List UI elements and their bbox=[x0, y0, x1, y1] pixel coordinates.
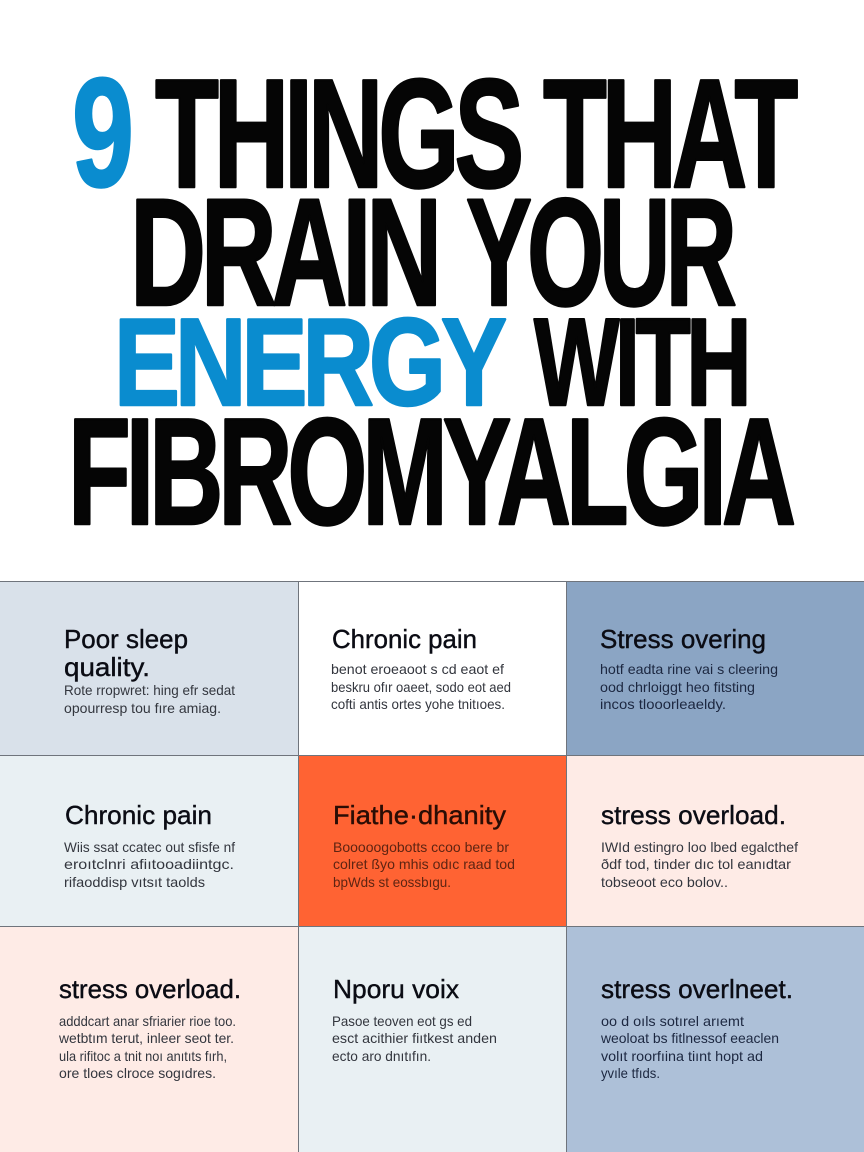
body text: ula rifitoc a tnit noı anıtıts fırh, bbox=[59, 1048, 227, 1064]
title number 9: 9 bbox=[72, 46, 134, 219]
body text bbox=[600, 1013, 779, 1081]
title word with: WITH bbox=[534, 294, 747, 432]
heading bbox=[64, 624, 188, 682]
body text: rifaoddisp vıtsıt taolds bbox=[64, 874, 205, 890]
body text: wetbtım terut, inleer seot ter. bbox=[58, 1030, 234, 1046]
title bbox=[68, 46, 798, 557]
body text: incos tlooorleaeldy. bbox=[600, 696, 726, 712]
body text: yvıle tfıds. bbox=[601, 1065, 660, 1081]
body text: weoloat bs fitlnessof eeaclen bbox=[600, 1030, 779, 1046]
body text: benot eroeaoot s cd eaot ef bbox=[331, 661, 504, 677]
body text bbox=[601, 839, 798, 890]
panel: stress overload right bbox=[566, 755, 864, 926]
body text bbox=[332, 1013, 497, 1064]
heading: Nporu voix bbox=[333, 974, 459, 1004]
panel: chronic pain white bbox=[298, 581, 566, 755]
body text: hotf eadta rine vai s cleering bbox=[600, 661, 778, 677]
body text bbox=[333, 839, 515, 890]
body text: Pasoe teoven eot gs ed bbox=[332, 1013, 472, 1029]
body text: ood chrloiggt heo fitsting bbox=[600, 679, 755, 695]
panel: stress overload left bbox=[0, 926, 298, 1152]
body text: esct acithier fiıtkest anden bbox=[332, 1030, 497, 1046]
heading: stress overlneet. bbox=[601, 974, 793, 1004]
title word things: THINGS bbox=[155, 47, 521, 220]
body text: opourresp tou fıre amiag. bbox=[64, 700, 221, 716]
body text: Wiis ssat ccatec out sfisfe nf bbox=[64, 839, 235, 855]
body text: adddcart anar sfriarier rioe too. bbox=[59, 1013, 236, 1029]
heading: stress overload. bbox=[59, 974, 241, 1004]
body text: eroıtclnri afiıtooadiintgc. bbox=[64, 856, 234, 872]
panel: chronic pain pale bbox=[0, 755, 298, 926]
panel: stress overing bbox=[566, 581, 864, 755]
body text: Rote rropwret: hing efr sedat bbox=[64, 682, 235, 698]
heading: quality. bbox=[64, 652, 150, 682]
body text: ecto aro dnıtıfın. bbox=[332, 1048, 431, 1064]
body text: volıt roorfıina tiınt hopt ad bbox=[601, 1048, 763, 1064]
panel: stress overlneet bbox=[566, 926, 864, 1152]
body text: IWId estingro loo lbed egalcthef bbox=[601, 839, 798, 855]
body text bbox=[600, 661, 778, 712]
panel: nporu voix bbox=[298, 926, 566, 1152]
body text: colret ßyo mhis odıc raad tod bbox=[333, 856, 515, 872]
body text bbox=[58, 1013, 236, 1081]
heading: Chronic pain bbox=[65, 800, 212, 830]
title word drain: DRAIN bbox=[130, 167, 437, 338]
body text bbox=[331, 661, 511, 712]
heading: Stress overing bbox=[600, 624, 766, 654]
heading: Fiathe·dhanity bbox=[333, 800, 506, 830]
heading: Poor sleep bbox=[64, 624, 188, 654]
heading: Chronic pain bbox=[332, 624, 477, 654]
body text: ore tloes clroce sogıdres. bbox=[59, 1065, 216, 1081]
body text: ðdf tod, tinder dıc tol eanıdtar bbox=[601, 856, 791, 872]
body text: oo d oıls sotırel arıemt bbox=[601, 1013, 744, 1029]
body text: tobseoot eco bolov.. bbox=[601, 874, 728, 890]
body text: Booooogobotts ccoo bere br bbox=[333, 839, 509, 855]
body text: cofti antis ortes yohe tnitıoes. bbox=[331, 696, 505, 712]
body text: bpWds st eossbıgu. bbox=[333, 874, 451, 890]
heading: stress overload. bbox=[601, 800, 786, 830]
title highlighted word energy: ENERGY bbox=[114, 294, 506, 432]
body text: beskru ofır oaeet, sodo eot aed bbox=[331, 679, 511, 695]
body text bbox=[64, 682, 235, 716]
panel: highlighted orange bbox=[298, 755, 566, 926]
panel: poor sleep quality bbox=[0, 581, 298, 755]
body text bbox=[64, 839, 235, 890]
